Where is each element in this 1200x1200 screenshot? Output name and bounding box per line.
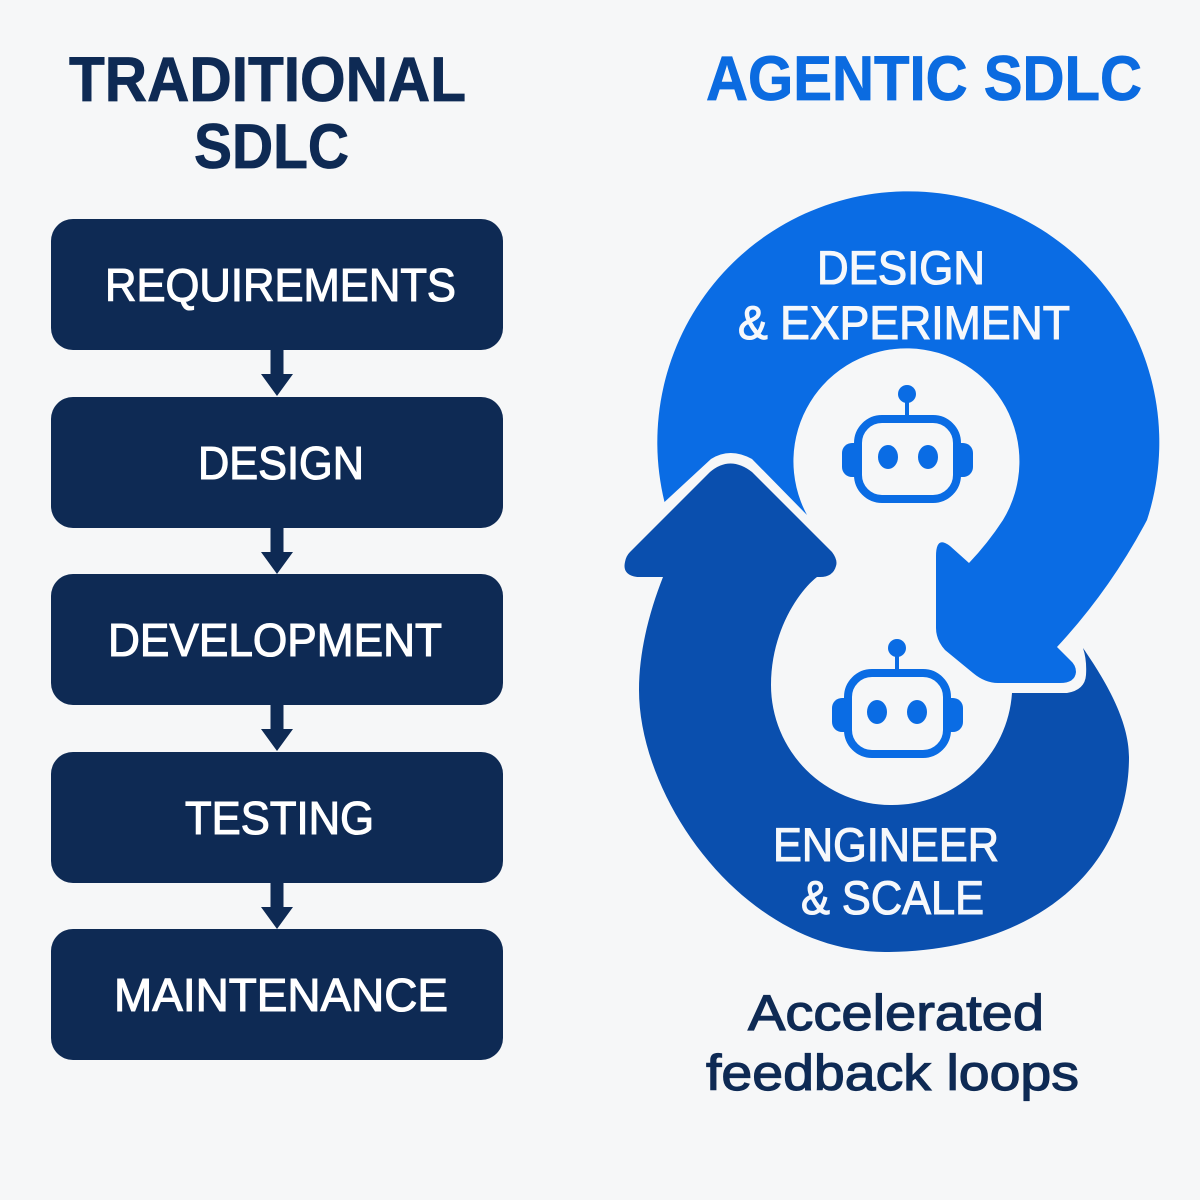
title: traditional SDLC: SDLC xyxy=(194,112,349,182)
title: traditional SDLC xyxy=(69,45,466,182)
step: development xyxy=(51,574,503,705)
step: requirements: REQUIREMENTS xyxy=(105,259,456,311)
arrow: design to development xyxy=(261,528,293,574)
caption: accelerated feedback loops: feedback loops xyxy=(706,1045,1079,1101)
arrow: development to testing xyxy=(261,705,293,751)
step: testing xyxy=(51,752,503,883)
arrow: design and experiment loop xyxy=(657,191,1159,683)
label: design and experiment: & EXPERIMENT xyxy=(738,296,1070,349)
caption: accelerated feedback loops xyxy=(706,985,1079,1101)
label: design and experiment: DESIGN xyxy=(817,241,985,294)
icon: robot top xyxy=(842,385,973,499)
step: design xyxy=(51,397,503,528)
title: traditional SDLC: TRADITIONAL xyxy=(69,45,466,115)
title: agentic SDLC: AGENTIC SDLC xyxy=(706,44,1142,114)
arrow: requirements to design xyxy=(261,350,293,396)
caption: accelerated feedback loops: Accelerated xyxy=(748,985,1044,1041)
step: requirements xyxy=(51,219,503,350)
arrow: testing to maintenance xyxy=(261,883,293,929)
arrow: engineer and scale loop xyxy=(624,464,1129,952)
panel: traditional waterfall steps xyxy=(51,219,503,1060)
label: design and experiment xyxy=(738,241,1070,349)
step: maintenance xyxy=(51,929,503,1060)
step: testing: TESTING xyxy=(185,792,374,844)
label: engineer and scale: ENGINEER xyxy=(773,818,999,871)
step: maintenance: MAINTENANCE xyxy=(114,969,448,1021)
panel: agentic loop xyxy=(624,191,1159,952)
label: engineer and scale xyxy=(773,818,999,924)
icon: robot bottom xyxy=(832,639,963,754)
step: development: DEVELOPMENT xyxy=(108,614,442,666)
step: design: DESIGN xyxy=(198,437,364,489)
label: engineer and scale: & SCALE xyxy=(801,871,984,924)
